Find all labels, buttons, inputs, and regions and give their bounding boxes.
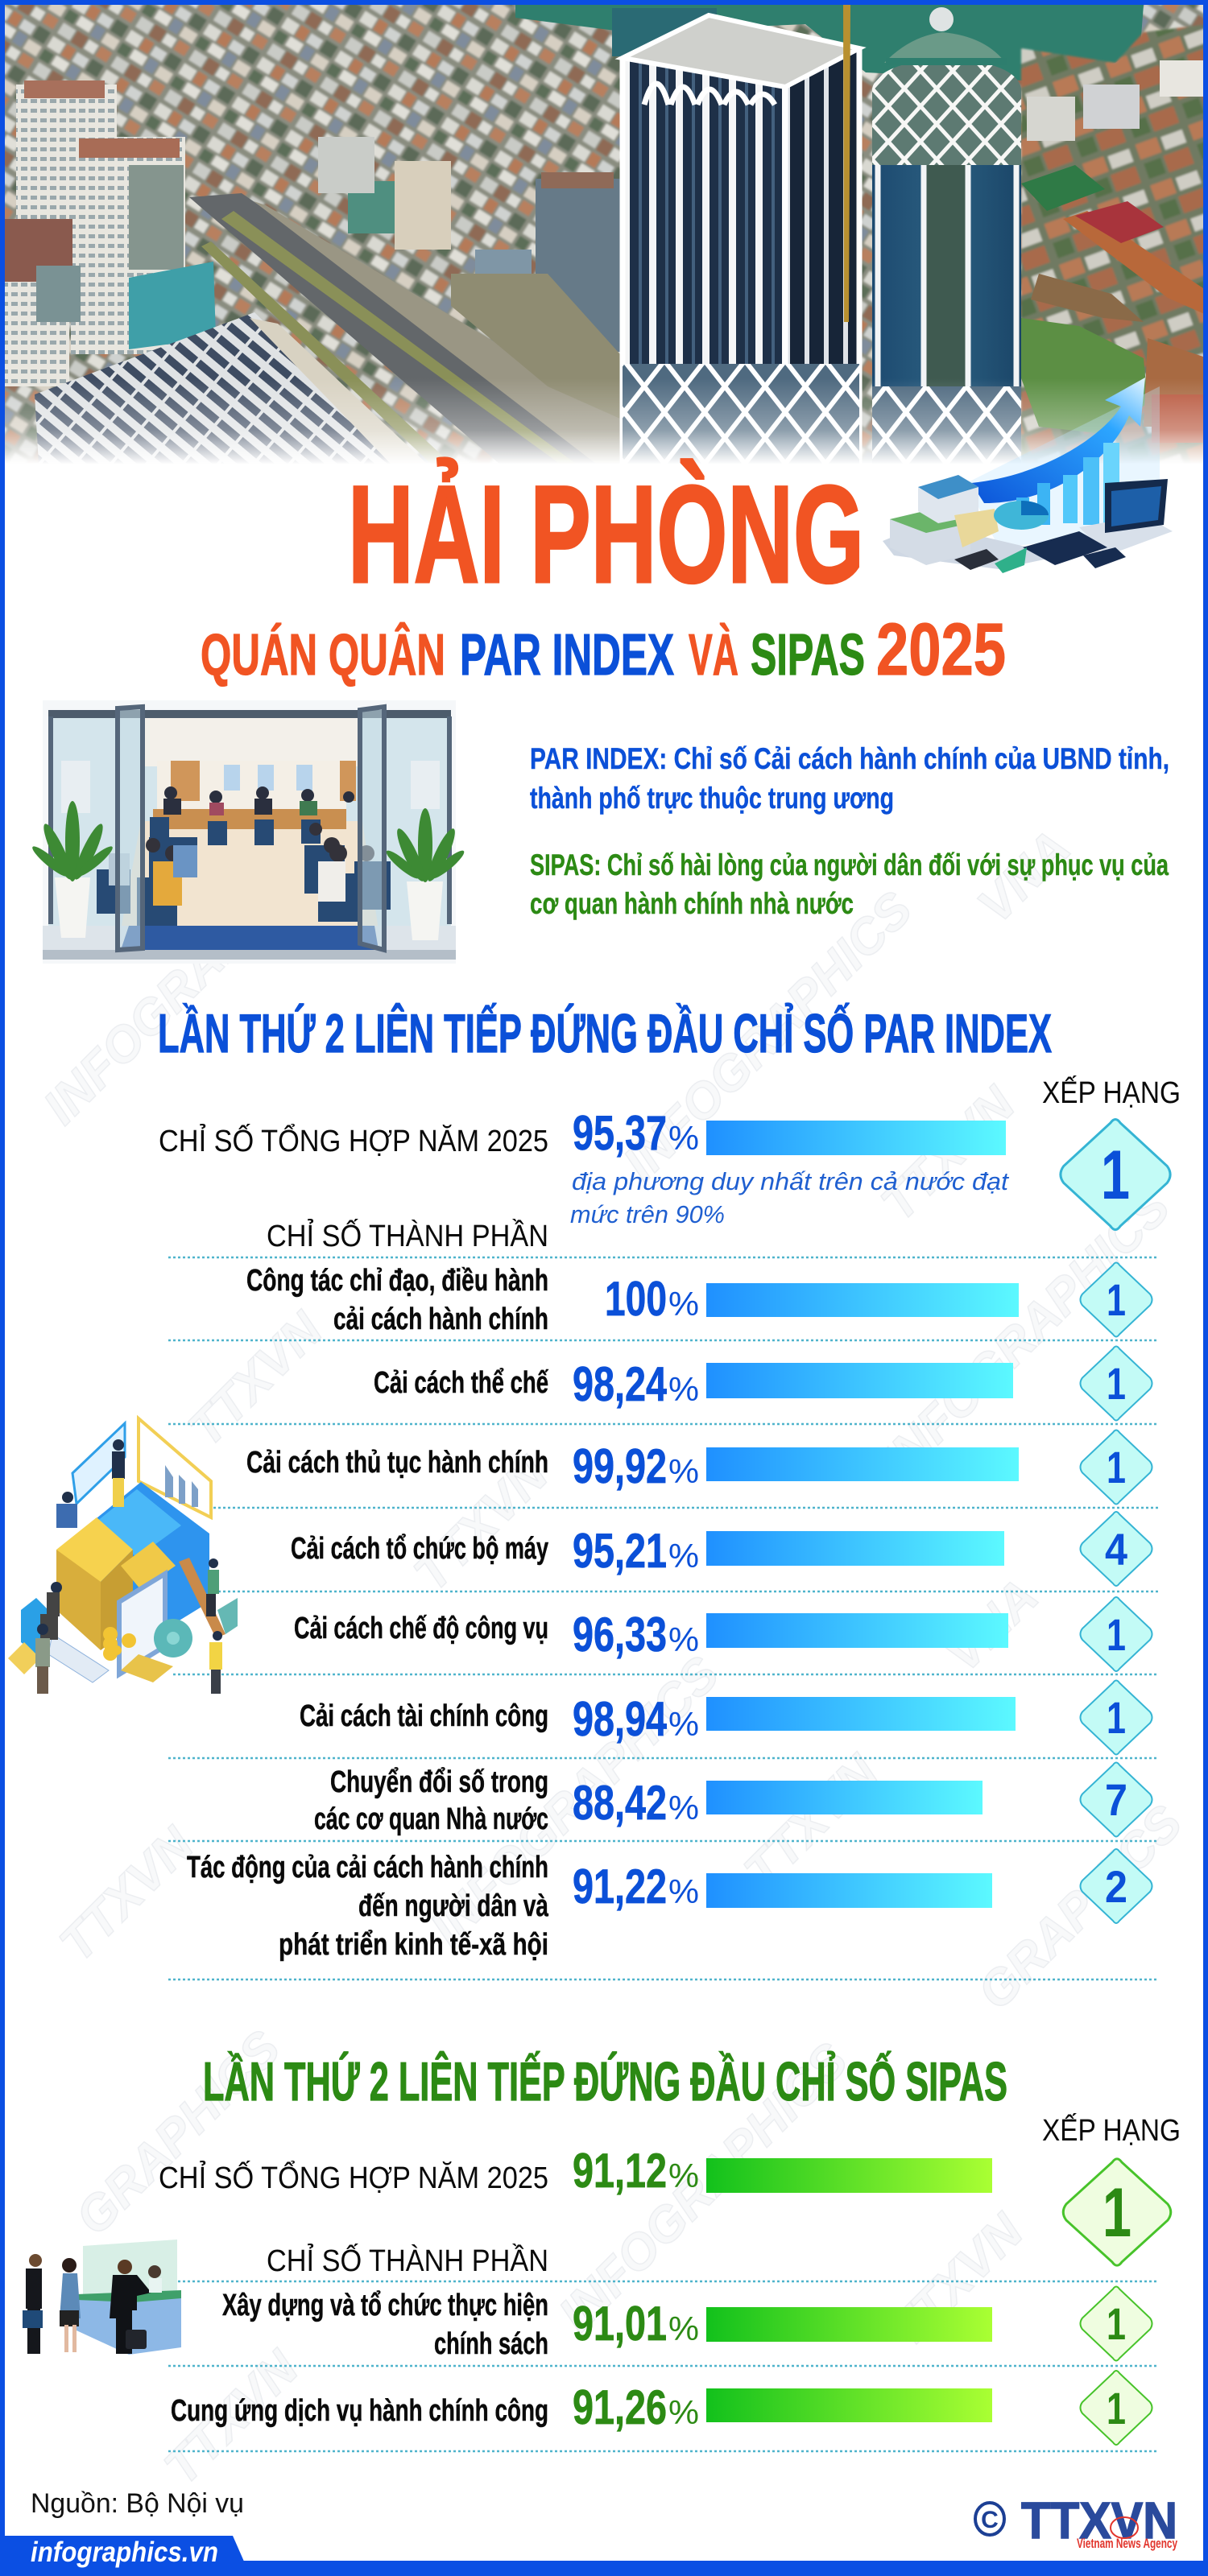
logo: TTXVN: TTXVN bbox=[1021, 2491, 1177, 2549]
footer bar: infographics.vn bbox=[31, 2537, 218, 2568]
left glass tower bbox=[623, 15, 859, 464]
row: Cải cách tài chính công: 98,94 bbox=[573, 1692, 667, 1746]
row: Cải cách thủ tục hành chính: % bbox=[668, 1452, 699, 1490]
note under overall bar: địa phương duy nhất trên cả nước đạt bbox=[572, 1167, 1009, 1195]
watermarks: VNA bbox=[935, 1569, 1049, 1682]
rank column label: XẾP HẠNG bbox=[1042, 2112, 1181, 2148]
row: Tác động của cải cách hành chính: Tác động của cải cách hành chính bbox=[187, 1851, 548, 1885]
row: Cải cách thủ tục hành chính: 1 bbox=[1107, 1442, 1126, 1492]
watermarks: TTXVN bbox=[734, 1744, 889, 1900]
row: Cải cách tổ chức bộ máy: Cải cách tổ chức bộ máy bbox=[291, 1532, 548, 1566]
definition text: SIPAS bbox=[530, 848, 1169, 920]
central road bbox=[189, 193, 636, 464]
crane mast bbox=[843, 5, 850, 322]
row: Cải cách tổ chức bộ máy: 4 bbox=[1105, 1524, 1127, 1575]
row: Công tác chỉ đạo: Công tác chỉ đạo, điều hành bbox=[246, 1264, 548, 1298]
overall index row: % bbox=[668, 2157, 699, 2194]
row: Công tác chỉ đạo: 1 bbox=[1107, 1274, 1126, 1325]
row: Công tác chỉ đạo: % bbox=[668, 1285, 699, 1323]
logo: TTXVN: C bbox=[981, 2507, 999, 2533]
row: Chuyển đổi số: các cơ quan Nhà nước bbox=[314, 1802, 548, 1836]
row: Cải cách thủ tục hành chính: Cải cách thủ tục hành chính bbox=[246, 1446, 548, 1480]
solar panel roof bbox=[35, 312, 407, 464]
row: Cải cách chế độ công vụ bbox=[294, 1597, 1152, 1671]
row: Xây dựng và tổ chức thực hiện chính sách: 1 bbox=[1107, 2298, 1126, 2349]
row: Chuyển đổi số bbox=[314, 1763, 1152, 1837]
row: Tác động của cải cách hành chính: 91,22 bbox=[573, 1860, 667, 1913]
row: Cung ứng dịch vụ hành chính công: 1 bbox=[1107, 2383, 1126, 2434]
subtitle: PAR INDEX bbox=[460, 623, 674, 687]
row: Cải cách tổ chức bộ máy: 95,21 bbox=[573, 1524, 667, 1578]
row: Tác động của cải cách hành chính: 2 bbox=[1105, 1861, 1127, 1912]
row: Cải cách thể chế: 1 bbox=[1107, 1358, 1126, 1409]
row: Cải cách chế độ công vụ: Cải cách chế độ công vụ bbox=[294, 1612, 548, 1645]
sub-index label: CHỈ SỐ THÀNH PHẦN bbox=[267, 2242, 548, 2278]
subtitle bbox=[201, 609, 1006, 691]
footer bar bbox=[0, 2536, 1208, 2576]
sea bbox=[515, 5, 1144, 80]
subtitle: VÀ bbox=[689, 623, 738, 687]
title: HẢI PHÒNG bbox=[348, 457, 864, 612]
row: Xây dựng và tổ chức thực hiện chính sách: Xây dựng và tổ chức thực hiện bbox=[222, 2289, 548, 2322]
row: Xây dựng và tổ chức thực hiện chính sách: 91,01 bbox=[573, 2297, 667, 2351]
definition text: PAR INDEX: thành phố trực thuộc trung ương bbox=[530, 782, 894, 815]
watermarks: INFOGRAPHICS bbox=[871, 1179, 1181, 1489]
row: Cải cách tài chính công: % bbox=[668, 1705, 699, 1743]
row: Chuyển đổi số: % bbox=[668, 1789, 699, 1827]
row: Cải cách thể chế: 98,24 bbox=[573, 1357, 667, 1411]
watermarks bbox=[33, 741, 1193, 2496]
definition text: SIPAS: cơ quan hành chính nhà nước bbox=[530, 887, 854, 920]
bottom white fade bbox=[0, 378, 1208, 464]
row: Cải cách chế độ công vụ: 1 bbox=[1107, 1609, 1126, 1660]
sub-index label: CHỈ SỐ THÀNH PHẦN bbox=[267, 1217, 548, 1253]
row: Cải cách thể chế: % bbox=[668, 1370, 699, 1408]
overall index row bbox=[159, 2144, 992, 2198]
watermarks: TTXVN bbox=[154, 2340, 309, 2496]
overall rank diamond bbox=[1063, 2159, 1171, 2265]
watermarks: GRAPHICS bbox=[65, 2021, 291, 2246]
overall index row: 91,12 bbox=[573, 2144, 667, 2198]
note under overall bar: mức trên 90% bbox=[570, 1200, 725, 1228]
subtitle: QUÁN QUÂN bbox=[201, 622, 445, 687]
watermarks: TTXVN bbox=[871, 1076, 1026, 1232]
row: Tác động của cải cách hành chính: phát triển kinh tế-xã hội bbox=[279, 1928, 548, 1962]
watermarks: GRAPHICS bbox=[967, 1795, 1193, 2021]
rank column label: XẾP HẠNG bbox=[1042, 1075, 1181, 1110]
overall rank diamond bbox=[1061, 1119, 1170, 1230]
right district bbox=[1021, 24, 1208, 464]
overall index row: % bbox=[668, 1119, 699, 1157]
row: Xây dựng và tổ chức thực hiện chính sách bbox=[222, 2286, 1152, 2361]
watermarks: INFOGRAPHICS bbox=[420, 1646, 730, 1956]
row: Cải cách tài chính công: 1 bbox=[1107, 1692, 1126, 1743]
watermarks: INFOGRAPHICS bbox=[613, 881, 923, 1191]
watermarks: GRAPHICS bbox=[130, 741, 355, 966]
row: Cải cách thể chế bbox=[374, 1346, 1152, 1420]
watermarks: TTXVN bbox=[49, 1817, 205, 1972]
watermarks: TTXVN bbox=[178, 1302, 333, 1457]
row: Cải cách tổ chức bộ máy bbox=[291, 1512, 1152, 1586]
overall index row: CHỈ SỐ TỔNG HỢP NĂM 2025 bbox=[159, 1122, 548, 1158]
source note: Nguồn: Bộ Nội vụ bbox=[31, 2488, 244, 2519]
row: Tác động của cải cách hành chính bbox=[187, 1849, 1152, 1962]
row: Tác động của cải cách hành chính: % bbox=[668, 1872, 699, 1910]
illustration: isometric team building reports bbox=[8, 1418, 238, 1694]
row: Công tác chỉ đạo: cải cách hành chính bbox=[333, 1302, 548, 1336]
row: Chuyển đổi số: 7 bbox=[1105, 1774, 1127, 1825]
watermarks: TTXVN bbox=[403, 1447, 559, 1602]
overall index row: 95,37 bbox=[573, 1106, 667, 1160]
watermarks: INFOGRAPHICS bbox=[33, 825, 343, 1135]
row: Chuyển đổi số: 88,42 bbox=[573, 1776, 667, 1830]
row: Cung ứng dịch vụ hành chính công: Cung ứng dịch vụ hành chính công bbox=[171, 2394, 548, 2428]
row: Cung ứng dịch vụ hành chính công: % bbox=[668, 2393, 699, 2431]
row: Chuyển đổi số: Chuyển đổi số trong bbox=[330, 1765, 548, 1799]
row: Cải cách tài chính công: Cải cách tài chính công bbox=[300, 1699, 548, 1733]
icon: growth arrow and digital devices bbox=[883, 378, 1173, 573]
row: Cải cách tài chính công bbox=[300, 1681, 1152, 1755]
panel: SIPAS results bbox=[159, 2112, 1181, 2451]
note under overall bar bbox=[570, 1167, 1009, 1228]
row: Cải cách thủ tục hành chính bbox=[246, 1430, 1152, 1504]
row: Cải cách thể chế: Cải cách thể chế bbox=[374, 1366, 549, 1400]
row: Cải cách chế độ công vụ: % bbox=[668, 1620, 699, 1658]
row: Xây dựng và tổ chức thực hiện chính sách: chính sách bbox=[434, 2327, 548, 2361]
row: Cải cách chế độ công vụ: 96,33 bbox=[573, 1608, 667, 1662]
illustration: citizens at service counter bbox=[23, 2240, 181, 2355]
panel: PAR INDEX results bbox=[159, 1075, 1181, 1979]
row: Cải cách thủ tục hành chính: 99,92 bbox=[573, 1439, 667, 1493]
right round tower bbox=[872, 7, 1021, 464]
watermarks: INFOGRAPHICS bbox=[548, 2033, 858, 2343]
row: Công tác chỉ đạo bbox=[246, 1262, 1152, 1336]
subtitle: SIPAS bbox=[751, 623, 865, 687]
watermarks: TTXVN bbox=[879, 2203, 1034, 2359]
mid-rise buildings bbox=[318, 8, 717, 419]
row: Công tác chỉ đạo: 100 bbox=[605, 1272, 667, 1326]
subtitle: 2025 bbox=[876, 609, 1006, 691]
overall rank diamond: 1 bbox=[1101, 1137, 1130, 1214]
hero photo: Hai Phong aerial city view bbox=[0, 0, 1208, 464]
definition text: PAR INDEX bbox=[530, 742, 1169, 815]
watermarks: VNA bbox=[967, 820, 1081, 934]
overall index row: CHỈ SỐ TỔNG HỢP NĂM 2025 bbox=[159, 2159, 548, 2195]
left apartment towers bbox=[5, 80, 216, 386]
row: Cung ứng dịch vụ hành chính công: 91,26 bbox=[573, 2380, 667, 2434]
row: Tác động của cải cách hành chính: đến người dân và bbox=[358, 1889, 549, 1923]
overall rank diamond: 1 bbox=[1103, 2174, 1131, 2252]
row: Cung ứng dịch vụ hành chính công bbox=[171, 2371, 1152, 2445]
overall index row bbox=[159, 1106, 1006, 1160]
illustration: public service office bbox=[30, 700, 467, 964]
row: Cải cách tổ chức bộ máy: % bbox=[668, 1537, 699, 1575]
row: Xây dựng và tổ chức thực hiện chính sách: % bbox=[668, 2310, 699, 2347]
